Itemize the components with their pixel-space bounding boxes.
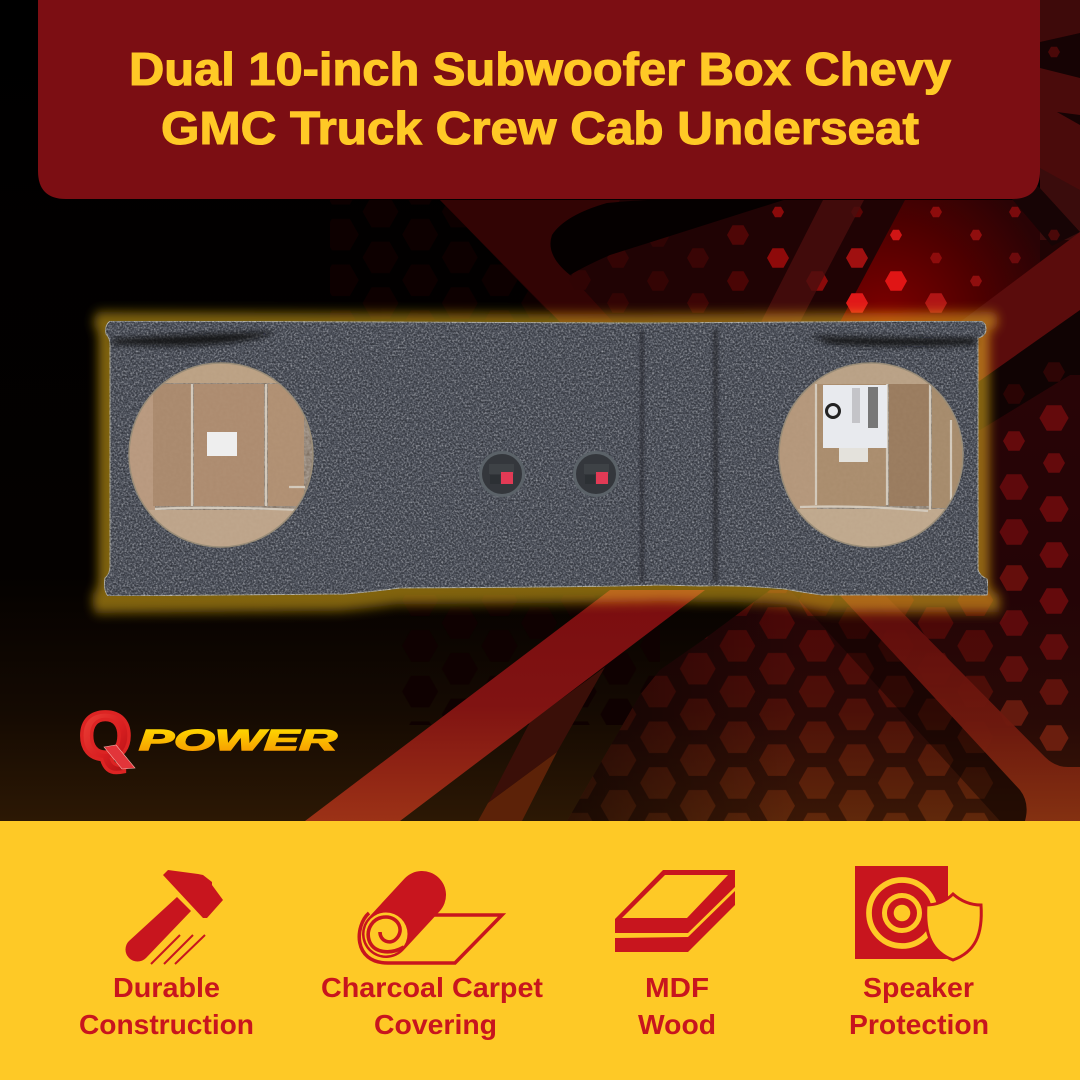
logo: Q Power xyxy=(79,698,337,774)
top right column xyxy=(1040,0,1080,240)
title line 1: Dual 10-inch Subwoofer Box Chevy xyxy=(129,43,951,95)
product: subwoofer box xyxy=(104,321,988,596)
label: Speaker Protection xyxy=(849,972,989,1040)
product glow xyxy=(93,312,1000,613)
label: Durable Construction: Durable xyxy=(113,972,220,1003)
label: Durable Construction: Construction xyxy=(79,1009,254,1040)
diagonal red band xyxy=(305,590,705,821)
background diagonal shapes lower xyxy=(478,590,1080,821)
label: MDF Wood: Wood xyxy=(638,1009,716,1040)
hexagons: right edge xyxy=(999,362,1069,751)
title line 2: GMC Truck Crew Cab Underseat xyxy=(161,102,919,154)
label: Durable Construction xyxy=(79,972,254,1040)
title banner xyxy=(38,0,1040,199)
label: Charcoal Carpet Covering: Charcoal Carpet xyxy=(321,972,543,1003)
dark band xyxy=(790,590,1027,821)
hexagon field: lower right xyxy=(560,590,996,821)
background xyxy=(0,0,1080,821)
top shadow left xyxy=(112,332,275,346)
center panel xyxy=(640,330,718,582)
icon: speaker with shield xyxy=(855,866,981,960)
logo: Q Power: POWER xyxy=(139,725,337,757)
red band right xyxy=(835,590,1080,821)
product label xyxy=(823,385,887,462)
label: Speaker Protection: Protection xyxy=(849,1009,989,1040)
background diagonal shapes upper xyxy=(550,198,1080,382)
top shadow right xyxy=(810,336,976,346)
label: Charcoal Carpet Covering: Covering xyxy=(374,1009,497,1040)
icon: MDF boards xyxy=(615,870,735,952)
wedge orange xyxy=(478,752,557,821)
faint hexagons left xyxy=(330,200,660,725)
hexagons: upper right xyxy=(569,47,1060,313)
terminal right xyxy=(574,452,618,496)
label: Speaker Protection: Speaker xyxy=(863,972,974,1003)
logo: Q Power: Q xyxy=(79,698,132,774)
right cutout xyxy=(775,360,970,554)
left cutout xyxy=(125,360,320,555)
upper red field xyxy=(440,200,1080,322)
icon: carpet roll xyxy=(359,895,502,963)
label: Charcoal Carpet Covering xyxy=(321,972,543,1040)
icon: hammer xyxy=(125,870,223,964)
carpet body xyxy=(104,321,988,596)
wedge maroon xyxy=(488,667,605,803)
right column xyxy=(960,375,1080,821)
label: MDF Wood xyxy=(638,972,716,1040)
label: MDF Wood: MDF xyxy=(645,972,709,1003)
feature strip xyxy=(0,821,1080,1080)
terminal left xyxy=(480,452,524,496)
